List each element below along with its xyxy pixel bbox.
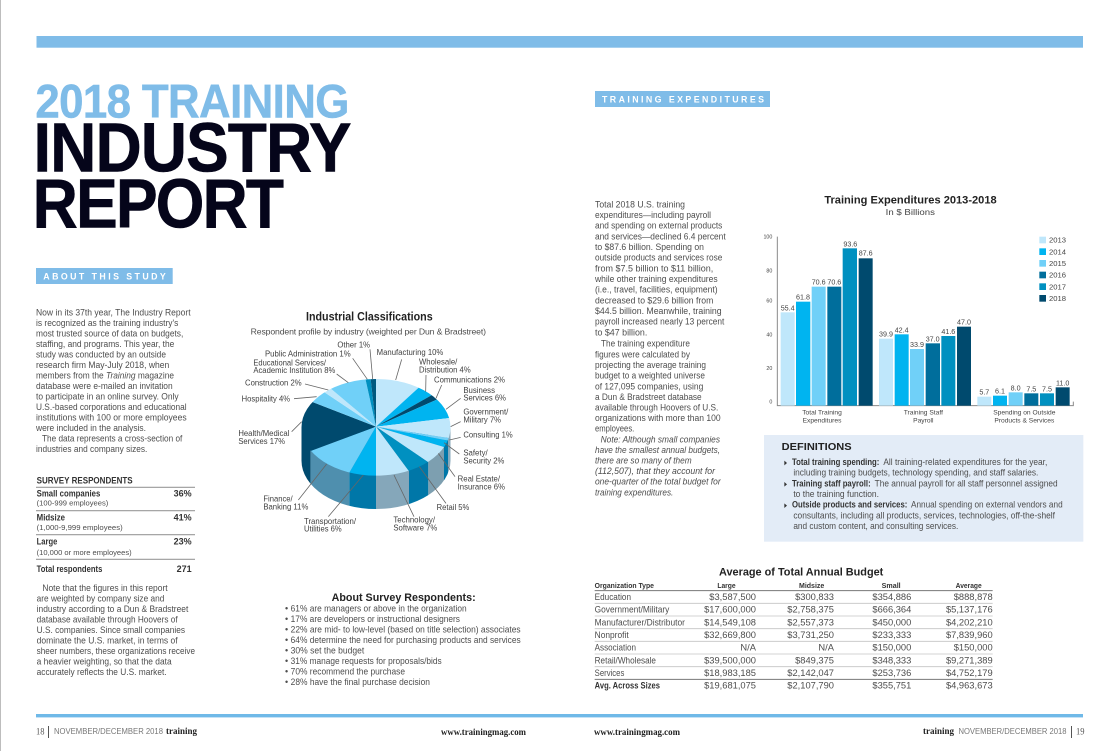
text block: expenditures article: decreased to $29.6 billion from: [595, 295, 713, 305]
table: survey respondents: (10,000 or more employees): [37, 548, 132, 557]
table rows: $9,271,389: [946, 655, 993, 665]
table rows: $3,731,250: [787, 630, 834, 640]
survey bullets: •: [285, 604, 288, 614]
text block: expenditures article: from $7.5 billion to $11 billion,: [595, 263, 713, 273]
table: survey respondents: SURVEY RESPONDENTS: [37, 475, 133, 485]
text block: expenditures article: of 127,095 companies, using: [595, 381, 703, 391]
definition: outside products and services: Annual spending on external vendors and: [911, 500, 1063, 510]
bars: spending on outside products: 7.5: [1026, 385, 1036, 393]
bottom blue bar: [36, 714, 1083, 717]
bars: total training expenditures: 93.6: [843, 240, 857, 248]
pie slice labels: Safety/: [463, 448, 488, 458]
text block: expenditures article: (112,507), that they account for: [595, 466, 716, 476]
chart legend: 2016: [1049, 271, 1066, 280]
footer: right page: 19: [1076, 726, 1085, 736]
survey bullets: •: [285, 625, 288, 635]
table rows: $450,000: [872, 617, 911, 627]
table rows: $14,549,108: [704, 617, 756, 627]
text block: expenditures article: Note: Although small companies: [601, 434, 720, 444]
table rows: $4,752,179: [946, 668, 993, 678]
table rows: N/A: [740, 643, 757, 653]
table rows: Education: [595, 592, 631, 602]
bars: spending on outside products: 11.0: [1056, 379, 1069, 387]
text block: expenditures article: employees.: [595, 424, 634, 434]
text block: about this study intro: industries and company sizes.: [36, 444, 147, 454]
table: survey respondents: Total respondents: [37, 564, 102, 574]
pie slice labels: Health/Medical: [238, 428, 289, 438]
bars: total training expenditures: 55.4: [781, 304, 795, 312]
footer: left page: [36, 726, 197, 738]
survey bullets: •: [285, 614, 288, 624]
pie slice labels: [238, 339, 513, 534]
pie top slices: [302, 379, 450, 476]
text block: about this study intro: [35, 307, 191, 454]
text block: expenditures article: have the smallest annual budgets,: [595, 445, 720, 455]
text block: about this study intro: U.S.-based corporations and educational: [36, 402, 187, 412]
footer: left page: training: [166, 726, 197, 736]
pie slice labels: Banking 11%: [263, 501, 309, 511]
pie slice labels: Insurance 6%: [458, 481, 506, 491]
text block: expenditures article: and spending on external products: [595, 221, 723, 231]
table rows: $888,878: [954, 592, 993, 602]
bars: total training expenditures: 70.6: [812, 279, 826, 287]
pie slice labels: Construction 2%: [245, 378, 302, 388]
category labels: Spending on Outside: [993, 410, 1056, 417]
footer: left url: www.trainingmag.com: [441, 727, 526, 737]
survey bullets: 17% are developers or instructional designers: [291, 614, 460, 624]
table rows: Government/Military: [595, 605, 670, 615]
pie slice labels: Wholesale/: [419, 357, 458, 367]
bars: training staff payroll: 42.4: [895, 326, 909, 334]
table: survey respondents: 271: [177, 564, 192, 574]
category labels: [802, 410, 1056, 424]
text block: expenditures article: one-quarter of the total budget for: [595, 477, 722, 487]
text block: expenditures article: there are so many of them: [595, 455, 692, 465]
pie subheading: Respondent profile by industry (weighted per Dun & Bradstreet): [251, 326, 486, 336]
table rows: $39,500,000: [704, 655, 756, 665]
definition: training staff payroll: to the training function.: [793, 489, 879, 499]
footer: right url: www.trainingmag.com: [594, 727, 680, 737]
survey bullets: •: [285, 635, 288, 645]
footer: right page: training: [923, 726, 954, 736]
y axis labels: [763, 235, 772, 406]
text block: expenditures article: (i.e., travel, facilities, equipment): [595, 285, 718, 295]
bars: training staff payroll: [879, 319, 971, 406]
table rows: Manufacturer/Distributor: [595, 617, 685, 627]
pie slice labels: Transportation/: [304, 516, 357, 526]
survey bullets: [285, 604, 521, 687]
survey bullets: 28% have the final purchase decision: [291, 677, 430, 687]
footer: right page: NOVEMBER/DECEMBER 2018: [958, 727, 1067, 736]
definitions heading: DEFINITIONS: [782, 442, 852, 453]
table title: Average of Total Annual Budget: [719, 567, 884, 579]
survey bullets: 70% recommend the purchase: [291, 667, 405, 677]
survey bullets: 31% manage requests for proposals/bids: [291, 656, 442, 666]
category labels: Total Training: [802, 410, 842, 417]
y axis labels: 20: [766, 366, 772, 372]
survey bullets: 61% are managers or above in the organization: [291, 604, 467, 614]
text block: about this study intro: study was conducted by an outside: [36, 349, 166, 359]
bars: training staff payroll: 47.0: [957, 319, 971, 327]
table: survey respondents: Midsize: [37, 512, 65, 522]
pie slice labels: Services 6%: [463, 393, 507, 403]
text block: about this study intro: institutions with 100 or more employees: [36, 412, 187, 422]
table: survey respondents: [36, 475, 195, 574]
table rows: $5,137,176: [946, 605, 993, 615]
table: survey respondents: 23%: [174, 537, 192, 547]
survey bullets: 30% set the budget: [291, 646, 365, 656]
pie slice labels: Distribution 4%: [419, 365, 471, 375]
pie slice labels: Business: [463, 385, 495, 395]
definition: outside products and services: and custom content, and consulting services.: [793, 521, 958, 531]
bars: training staff payroll: 39.9: [879, 331, 893, 339]
table rows: [595, 592, 993, 691]
table rows: $354,886: [872, 592, 911, 602]
chart legend: [1039, 236, 1067, 303]
text block: weighting note: [37, 583, 195, 677]
text block: expenditures article: outside products and services rose: [595, 253, 722, 263]
table header: Midsize: [799, 581, 824, 590]
table header: Average: [956, 581, 982, 590]
text block: about this study intro: were included in the analysis.: [35, 423, 146, 433]
y axis labels: 40: [766, 333, 772, 339]
table rows: Retail/Wholesale: [595, 655, 656, 665]
bars: total training expenditures: 70.6: [827, 279, 841, 287]
text block: about this study intro: research firm May-July 2018, when: [36, 360, 169, 370]
text block: expenditures article: organizations with more than 100: [595, 413, 721, 423]
table rows: $4,202,210: [946, 617, 993, 627]
definition: total training spending: including training budgets, technology spending, and staff salaries.: [793, 468, 1038, 478]
bars: spending on outside products: [977, 379, 1070, 406]
chart title: Training Expenditures 2013-2018: [824, 194, 997, 206]
pie slice labels: Academic Institution 8%: [253, 365, 336, 375]
definition: outside products and services: consultants, including all products, services, technologies, off-the-shelf: [793, 510, 1055, 520]
survey bullets: 64% determine the need for purchasing products and services: [291, 635, 521, 645]
text block: expenditures article: and services—declined 6.4 percent: [595, 231, 726, 241]
chart axes: [777, 237, 1073, 406]
table rows: N/A: [818, 643, 835, 653]
definition: outside products and services: Outside products and services:: [792, 500, 907, 510]
pie slice labels: Software 7%: [393, 523, 438, 533]
top blue bar: [36, 36, 1083, 48]
text block: expenditures article: a Dun & Bradstreet database: [595, 392, 702, 402]
y axis labels: 0: [769, 400, 772, 406]
table: survey respondents: (100-999 employees): [37, 499, 109, 508]
definition: outside products and services: [784, 500, 1063, 531]
text block: expenditures article: expenditures—including payroll: [595, 210, 711, 220]
chart legend: 2017: [1049, 282, 1066, 291]
section label: training expenditures: [595, 91, 770, 107]
text block: about this study intro: database were e-mailed an invitation: [36, 381, 173, 391]
pie slice labels: Retail 5%: [437, 502, 470, 512]
table rows: $19,681,075: [704, 681, 756, 691]
pie heading: Industrial Classifications: [306, 310, 433, 324]
pie slice labels: Educational Services/: [253, 357, 327, 367]
pie slice labels: Services 17%: [238, 436, 286, 446]
category labels: Expenditures: [803, 417, 842, 424]
table: survey respondents: Small companies: [37, 488, 100, 498]
pie slice labels: Real Estate/: [458, 473, 501, 483]
table rows: $666,364: [872, 605, 911, 615]
table rows: $17,600,000: [704, 605, 756, 615]
bars: training staff payroll: 37.0: [926, 335, 940, 343]
chart legend: 2015: [1049, 259, 1066, 268]
table header: Organization Type: [595, 581, 654, 590]
text block: weighting note: industry according to a Dun & Bradstreet: [37, 604, 189, 614]
bars: spending on outside products: 6.1: [995, 388, 1005, 396]
section label: training expenditures: TRAINING EXPENDITURES: [602, 94, 764, 104]
text block: about this study intro: The data represents a cross-section of: [42, 433, 183, 443]
table rows: $2,557,373: [787, 617, 834, 627]
definition: total training spending: All training-related expenditures for the year,: [883, 457, 1047, 467]
pie slice labels: Manufacturing 10%: [377, 347, 444, 357]
section label: about this study: ABOUT THIS STUDY: [43, 272, 166, 282]
definition: total training spending: [784, 457, 1047, 478]
survey bullets: •: [285, 646, 288, 656]
pie slice labels: Finance/: [263, 493, 293, 503]
survey bullets: •: [285, 677, 288, 687]
text block: about survey respondents: [285, 592, 521, 687]
text block: expenditures article: $44.5 billion. Meanwhile, training: [595, 306, 722, 316]
definition: total training spending: Total training spending:: [792, 457, 879, 467]
text block: about this study intro: members from the Training magazine: [36, 370, 174, 380]
text block: expenditures article: Total 2018 U.S. training: [595, 199, 685, 209]
footer: right page: [923, 726, 1085, 738]
text block: weighting note: dominate the U.S. market, in terms of: [37, 635, 178, 645]
chart legend: 2018: [1049, 294, 1066, 303]
text block: about this study intro: to participate in an online survey. Only: [36, 391, 179, 401]
pie slice labels: Military 7%: [463, 415, 502, 425]
title: 2018 TRAINING: [35, 75, 349, 128]
bars: spending on outside products: 5.7: [979, 389, 989, 397]
pie slice labels: Other 1%: [337, 339, 371, 349]
table rows: $150,000: [954, 643, 993, 653]
table rows: $150,000: [872, 643, 911, 653]
table: survey respondents: 41%: [174, 512, 192, 522]
title: REPORT: [33, 166, 284, 243]
table: survey respondents: Large: [37, 537, 57, 547]
bars: total training expenditures: 87.6: [859, 250, 873, 258]
table rows: Association: [595, 643, 636, 653]
title: INDUSTRY: [33, 109, 352, 187]
table header: [595, 581, 982, 590]
table rows: $18,983,185: [704, 668, 756, 678]
bars: training staff payroll: 41.6: [941, 328, 955, 336]
table rows: $2,142,047: [787, 668, 834, 678]
panel: industrial classifications pie chart: [238, 312, 512, 532]
title: [33, 75, 352, 243]
y axis labels: 80: [766, 268, 772, 274]
bars: total training expenditures: [781, 240, 873, 406]
text block: about this study intro: most trusted source of data on budgets,: [36, 328, 183, 338]
pie slice labels: Public Administration 1%: [265, 349, 351, 359]
pie slice labels: Hospitality 4%: [242, 393, 291, 403]
table: survey respondents: (1,000-9,999 employees): [37, 523, 123, 532]
text block: expenditures article: training expenditures.: [595, 487, 673, 497]
table rows: $849,375: [795, 655, 834, 665]
table rows: $233,333: [872, 630, 911, 640]
text block: weighting note: database available through Hoovers of: [37, 614, 178, 624]
text block: about this study intro: is recognized as the training industry's: [36, 318, 179, 328]
table rows: Nonprofit: [595, 630, 629, 640]
footer: left page: 18: [36, 726, 45, 736]
text block: expenditures article: to $47 billion.: [595, 327, 647, 337]
text block: weighting note: are weighted by company size and: [37, 593, 164, 603]
table rows: $7,839,960: [946, 630, 993, 640]
table: survey respondents: 36%: [174, 488, 192, 498]
panel: definitions: [764, 435, 1083, 542]
text block: expenditures article: projecting the average training: [595, 360, 706, 370]
text block: expenditures article: to $87.6 billion. Spending on: [595, 242, 704, 252]
survey heading: About Survey Respondents:: [332, 592, 476, 604]
table rows: $348,333: [872, 655, 911, 665]
category labels: Payroll: [913, 417, 934, 424]
pie side walls: [301, 427, 451, 513]
survey bullets: 22% are mid- to low-level (based on title selection) associates: [291, 625, 521, 635]
table rows: $32,669,800: [704, 630, 756, 640]
text block: expenditures article: budget to a weighted universe: [595, 371, 705, 381]
category labels: Products & Services: [994, 417, 1055, 424]
chart subtitle: In $ Billions: [886, 207, 936, 217]
text block: expenditures article: payroll increased nearly 13 percent: [595, 317, 725, 327]
pie slice labels: Utilities 6%: [304, 524, 342, 534]
table: average of total annual budget: [595, 567, 993, 691]
text block: expenditures article: available through Hoovers of U.S.: [595, 402, 718, 412]
pie slice labels: Communications 2%: [434, 374, 506, 384]
chart legend: 2013: [1049, 236, 1066, 245]
text block: about this study intro: staffing, and programs. This year, the: [36, 339, 174, 349]
bars: total training expenditures: 61.8: [796, 294, 810, 302]
pie slice labels: Government/: [463, 407, 509, 417]
text block: weighting note: a heavier weighting, so that the data: [37, 656, 172, 666]
pie slice labels: Security 2%: [463, 456, 505, 466]
definition: training staff payroll: The annual payroll for all staff personnel assigned: [875, 478, 1058, 488]
table rows: Services: [595, 668, 625, 678]
text block: weighting note: Note that the figures in this report: [42, 583, 168, 593]
text block: about this study intro: Now in its 37th year, The Industry Report: [36, 307, 191, 317]
table rows: Avg. Across Sizes: [595, 681, 660, 691]
y axis labels: 100: [763, 235, 772, 241]
table header: Small: [882, 581, 901, 590]
table rows: $2,107,790: [787, 681, 834, 691]
survey bullets: •: [285, 667, 288, 677]
table rows: $355,751: [872, 681, 911, 691]
survey bullets: •: [285, 656, 288, 666]
category labels: Training Staff: [904, 410, 943, 417]
bars: training staff payroll: 33.9: [910, 341, 924, 349]
table rows: $253,736: [872, 668, 911, 678]
text block: weighting note: U.S. companies. Since small companies: [37, 625, 185, 635]
bars: spending on outside products: 7.5: [1042, 385, 1052, 393]
text block: expenditures article: The training expenditure: [601, 339, 690, 349]
text block: expenditures article: [594, 199, 726, 497]
table rows: $3,587,500: [709, 592, 756, 602]
table rows: $300,833: [795, 592, 834, 602]
table header: Large: [717, 581, 736, 590]
definition: training staff payroll: Training staff payroll:: [792, 478, 871, 488]
text block: expenditures article: figures were calculated by: [595, 349, 690, 359]
footer: left page: NOVEMBER/DECEMBER 2018: [54, 727, 164, 736]
y axis labels: 60: [766, 299, 772, 305]
text block: weighting note: sheer numbers, these organizations receive: [37, 646, 195, 656]
pie slice labels: Technology/: [393, 515, 436, 525]
chart legend: 2014: [1049, 247, 1067, 256]
pie slice labels: Consulting 1%: [463, 429, 513, 439]
definition: training staff payroll: [784, 478, 1058, 499]
panel: training expenditures bar chart: [763, 194, 1073, 424]
table rows: $4,963,673: [946, 681, 993, 691]
text block: expenditures article: while other training expenditures: [594, 274, 718, 284]
section label: about this study: [36, 268, 173, 284]
bars: spending on outside products: 8.0: [1011, 384, 1021, 392]
text block: weighting note: accurately reflects the U.S. market.: [37, 667, 167, 677]
table rows: $2,758,375: [787, 605, 834, 615]
pie leader lines: [292, 349, 461, 517]
